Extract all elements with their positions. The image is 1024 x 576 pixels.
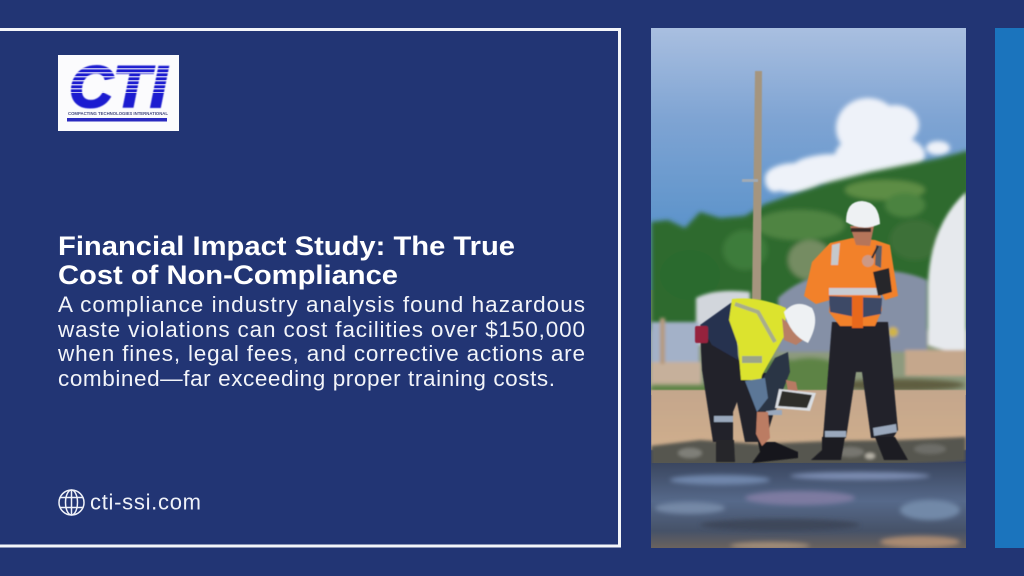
trousers	[823, 322, 898, 438]
body text: A compliance industry analysis found hazardous	[58, 292, 585, 317]
panel: text frame	[0, 30, 620, 546]
body text: waste violations can cost facilities over $150,000	[57, 317, 585, 342]
body text: when fines, legal fees, and corrective actions are	[57, 341, 585, 366]
title	[58, 231, 515, 290]
face	[782, 318, 806, 345]
rocks	[651, 437, 966, 466]
radio	[695, 326, 708, 343]
boots	[716, 440, 735, 462]
logo: CTI: CTI	[69, 55, 169, 120]
hillside	[651, 150, 970, 330]
title: Cost of Non-Compliance	[58, 260, 398, 290]
cloud	[765, 98, 950, 193]
face and hand	[850, 226, 874, 246]
website link: cti-ssi.com	[90, 490, 201, 514]
right accent bar	[995, 28, 1024, 548]
icon: globe	[59, 490, 84, 515]
arm	[746, 352, 790, 412]
sand ground	[651, 390, 966, 450]
tablet	[775, 389, 816, 411]
helmet	[846, 201, 880, 228]
shrubs	[651, 358, 965, 394]
jacket back	[700, 300, 738, 360]
hand	[756, 412, 770, 446]
hi-vis vest	[729, 298, 786, 380]
logo: CTI	[58, 55, 179, 131]
water	[651, 463, 966, 548]
body text	[57, 292, 585, 391]
midground base	[651, 290, 966, 395]
utility pole	[752, 71, 762, 300]
sky	[651, 28, 966, 290]
jacket	[804, 238, 898, 326]
helmet	[784, 304, 815, 343]
worker: right, orange jacket	[804, 201, 908, 460]
tanks and buildings	[651, 192, 966, 387]
title: Financial Impact Study: The True	[58, 231, 515, 261]
logo: CTI: COMPACTING TECHNOLOGIES INTERNATIONAL	[68, 111, 168, 116]
worker: left, yellow vest	[695, 298, 816, 463]
body text: combined—far exceeding proper training costs.	[58, 366, 555, 391]
photo: two workers inspecting a site	[651, 28, 970, 550]
trousers	[700, 338, 778, 443]
boots	[811, 437, 845, 460]
